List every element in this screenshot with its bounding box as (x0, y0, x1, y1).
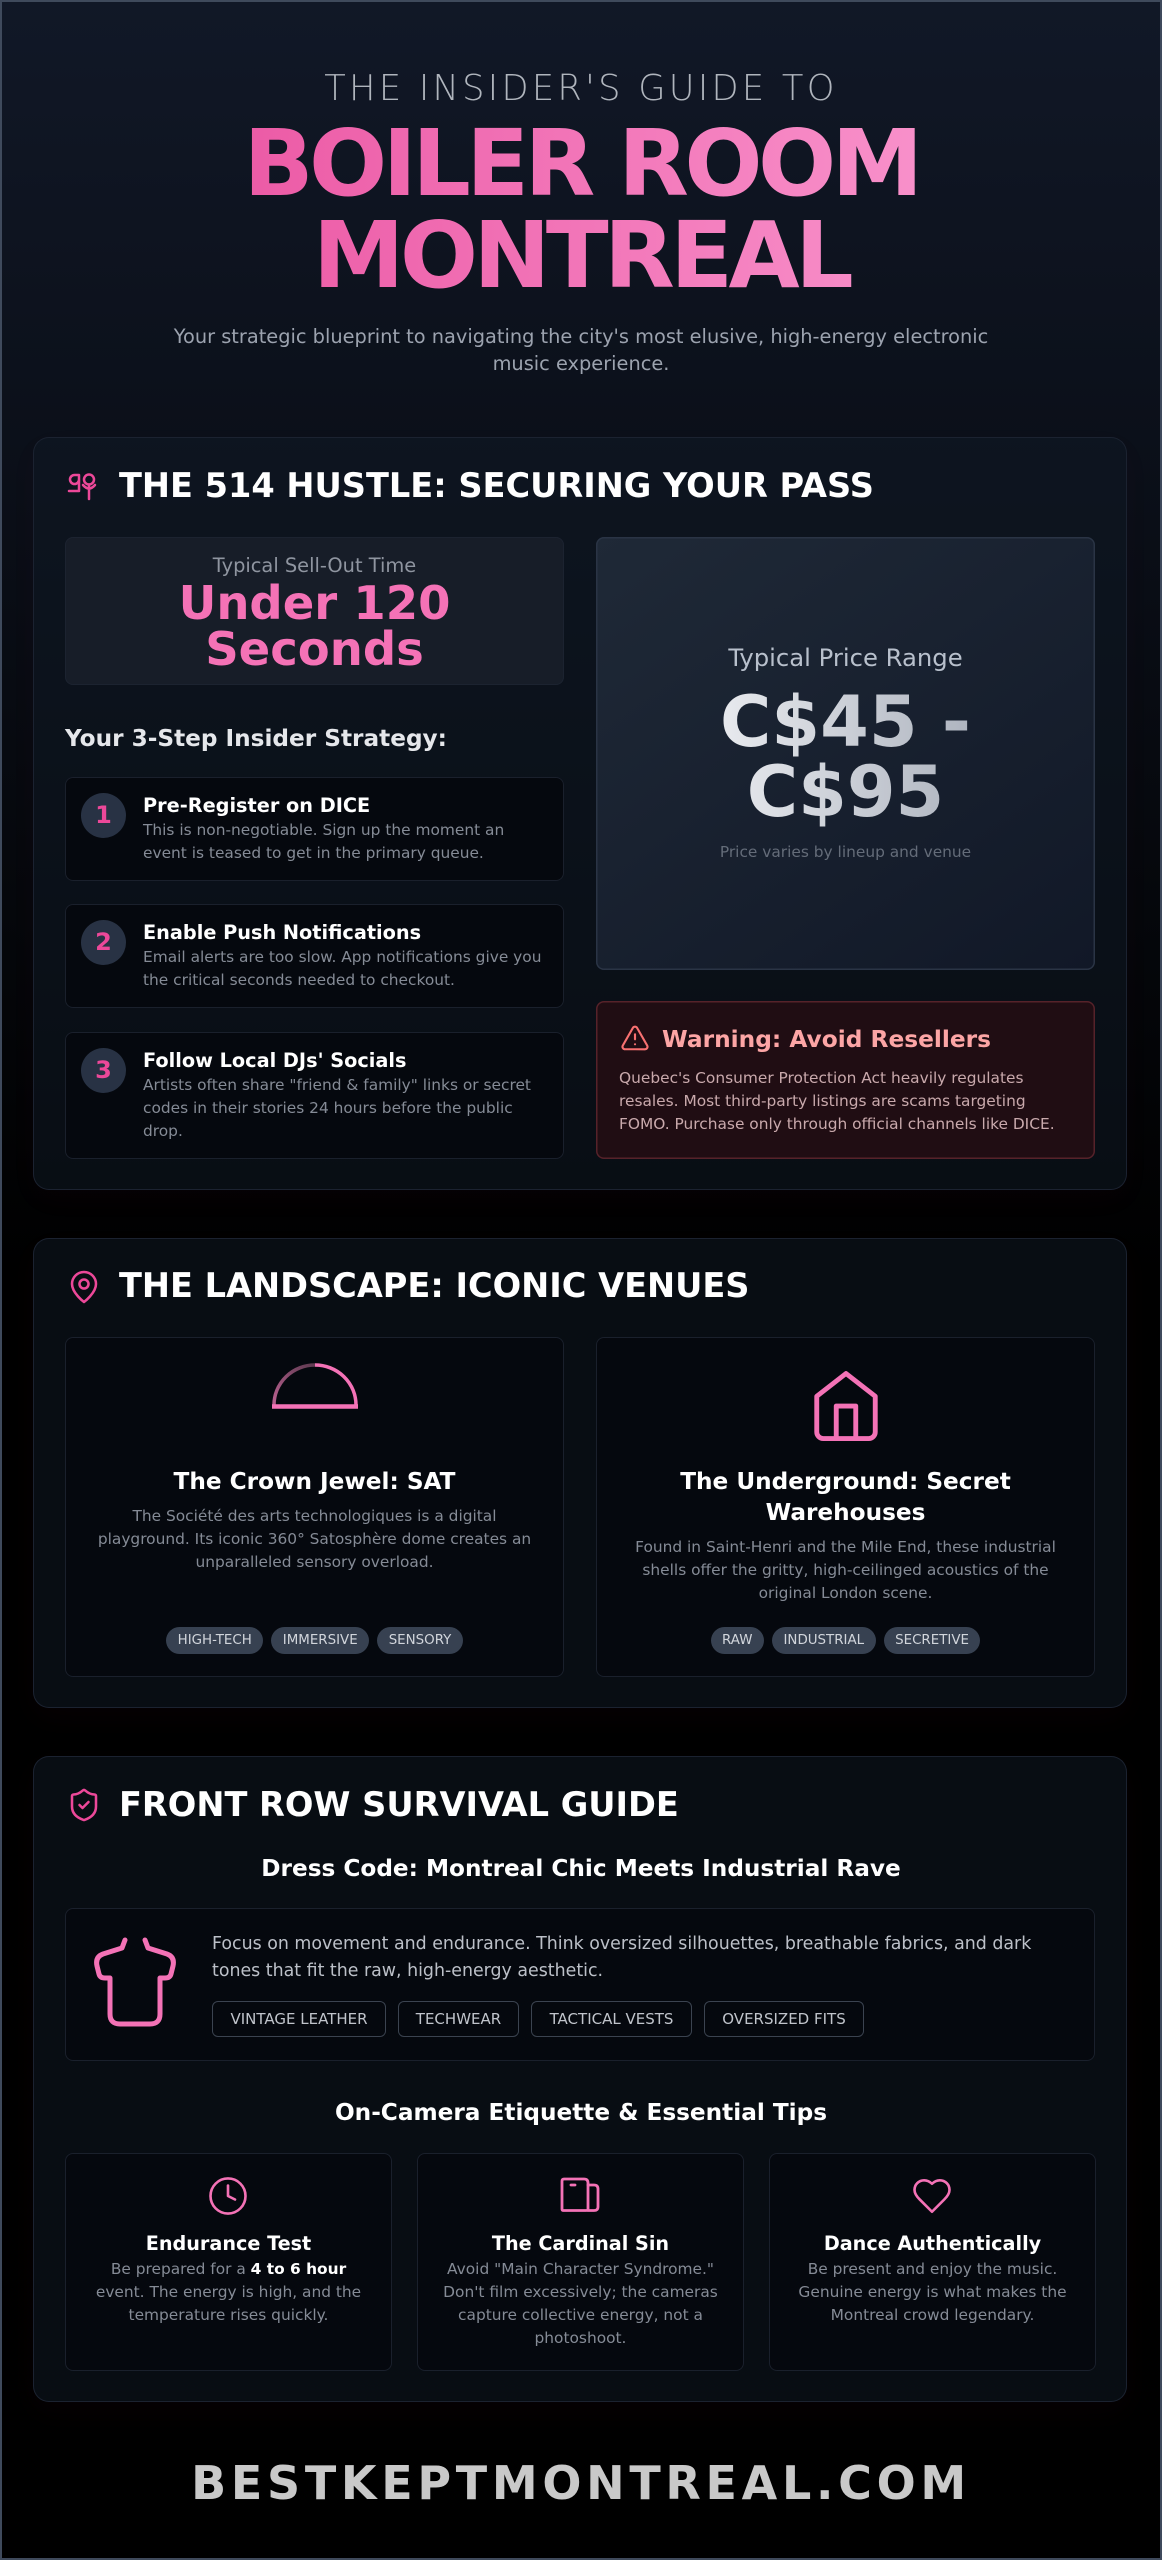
venue text (635, 1538, 1056, 1602)
step number (81, 1048, 126, 1093)
warning text: Quebec's Consumer Protection Act heavily regulates (619, 1069, 1023, 1087)
tip text: Be present and enjoy the music. (808, 2260, 1057, 2278)
tip text: Montreal crowd legendary. (831, 2306, 1034, 2324)
dress code text: tones that fit the raw, high-energy aesthetic. (212, 1961, 603, 1981)
venue card: SAT (65, 1337, 564, 1677)
tip text: event. The energy is high, and the (96, 2283, 361, 2301)
stat value: Under 120 (179, 576, 450, 630)
step number: 3 (95, 1056, 112, 1084)
icon: house (814, 1371, 878, 1441)
venue card: warehouses (596, 1337, 1095, 1677)
tip text: capture collective energy, not a (458, 2306, 703, 2324)
venue text: shells offer the gritty, high-ceilinged acoustics of the (642, 1561, 1049, 1579)
panel: the 514 hustle (33, 437, 1127, 1190)
tip card: cardinal sin (417, 2153, 744, 2371)
venue text: The Société des arts technologiques is a digital (132, 1507, 497, 1525)
section heading: THE LANDSCAPE: ICONIC VENUES (119, 1266, 750, 1305)
tip text: photoshoot. (535, 2329, 626, 2347)
venue title (680, 1468, 1011, 1526)
dress code text (212, 1934, 1032, 1981)
stat: price range (596, 537, 1095, 970)
stat value: Seconds (205, 622, 424, 676)
venue tags: IMMERSIVE (283, 1633, 358, 1648)
step number (81, 793, 126, 838)
price value: C$45 - (720, 681, 971, 763)
tip title: Dance Authentically (824, 2232, 1041, 2255)
price label: Typical Price Range (728, 643, 963, 672)
step text (142, 821, 504, 862)
venue tags: HIGH-TECH (178, 1633, 252, 1648)
subtitle: Your strategic blueprint to navigating the city's most elusive, high-energy electronic (174, 325, 988, 348)
step text: This is non-negotiable. Sign up the moment an (143, 821, 504, 839)
panel: iconic venues (33, 1238, 1127, 1708)
venue tags: RAW (722, 1633, 752, 1648)
icon: map pin (70, 1270, 98, 1304)
step 1 (65, 777, 564, 881)
dress code tags (212, 2001, 864, 2037)
stat: sell-out time (65, 537, 564, 685)
icon: shield check (70, 1788, 98, 1822)
footer brand: BESTKEPTMONTREAL.COM (191, 2456, 971, 2510)
strategy heading: Your 3-Step Insider Strategy: (65, 725, 447, 752)
subtitle: music experience. (493, 352, 669, 375)
step number: 1 (95, 801, 112, 829)
step text: codes in their stories 24 hours before the public (143, 1099, 513, 1117)
icon: dome (272, 1363, 358, 1409)
price value: C$95 (747, 750, 944, 832)
tip text (96, 2260, 361, 2324)
dress code tags: TECHWEAR (416, 2010, 501, 2028)
etiquette heading: On-Camera Etiquette & Essential Tips (335, 2099, 827, 2126)
tip text (443, 2260, 718, 2347)
dress code tags: TACTICAL VESTS (550, 2010, 673, 2028)
warning text: resales. Most third-party listings are scams targeting (619, 1092, 1026, 1110)
step title: Follow Local DJs' Socials (143, 1049, 406, 1072)
venue tags (711, 1627, 980, 1654)
step text: event is teased to get in the primary queue. (143, 844, 484, 862)
step 2 (65, 904, 564, 1008)
step number (81, 920, 126, 965)
venue text (98, 1507, 531, 1571)
warning callout (596, 1001, 1095, 1159)
icon: heart (913, 2179, 951, 2214)
main title: MONTREAL (313, 202, 849, 309)
section heading: FRONT ROW SURVIVAL GUIDE (119, 1785, 679, 1824)
tip text: Don't film excessively; the cameras (443, 2283, 718, 2301)
price note: Price varies by lineup and venue (720, 843, 971, 861)
tip title: Endurance Test (146, 2232, 311, 2255)
step number: 2 (95, 928, 112, 956)
tip text: Avoid "Main Character Syndrome." (447, 2260, 714, 2278)
step text: Email alerts are too slow. App notifications give you (143, 948, 541, 966)
stat value (179, 576, 450, 676)
dress code tags: OVERSIZED FITS (722, 2010, 846, 2028)
venue text: playground. Its iconic 360° Satosphère dome creates an (98, 1530, 531, 1548)
tip text: Be prepared for a 4 to 6 hour (111, 2260, 346, 2278)
venue text: unparalleled sensory overload. (195, 1553, 434, 1571)
dress code heading: Dress Code: Montreal Chic Meets Industrial Rave (261, 1855, 901, 1882)
venue tags: SENSORY (389, 1633, 451, 1648)
step 3 (65, 1032, 564, 1159)
venue title: The Crown Jewel: SAT (174, 1468, 455, 1495)
venue tags: INDUSTRIAL (783, 1633, 864, 1648)
venue tags (166, 1627, 463, 1654)
step text (143, 1076, 531, 1140)
tip text: temperature rises quickly. (129, 2306, 328, 2324)
warning text (619, 1069, 1055, 1133)
step text (143, 948, 541, 989)
warning title: Warning: Avoid Resellers (662, 1026, 991, 1053)
icon: phone (560, 2178, 600, 2212)
icon: shirt (94, 1938, 176, 2026)
tip title: The Cardinal Sin (492, 2232, 669, 2255)
main title (243, 110, 919, 309)
subtitle (174, 325, 988, 375)
dress code tags: VINTAGE LEATHER (230, 2010, 368, 2028)
venue text: original London scene. (759, 1584, 932, 1602)
header kicker: THE INSIDER'S GUIDE TO (324, 68, 838, 109)
main title: BOILER ROOM (243, 110, 919, 217)
step title: Pre-Register on DICE (143, 794, 370, 817)
step text: drop. (143, 1122, 183, 1140)
step title: Enable Push Notifications (143, 921, 421, 944)
venue tags: SECRETIVE (895, 1633, 969, 1648)
tip card: dance (769, 2153, 1096, 2371)
step text: the critical seconds needed to checkout. (143, 971, 455, 989)
icon: clock (209, 2177, 247, 2215)
price value (720, 681, 971, 832)
icon: warning triangle (621, 1026, 649, 1050)
tip text: Genuine energy is what makes the (798, 2283, 1067, 2301)
warning text: FOMO. Purchase only through official channels like DICE. (619, 1115, 1055, 1133)
step text: Artists often share "friend & family" links or secret (143, 1076, 531, 1094)
panel: front row survival guide (33, 1756, 1127, 2402)
venue text: Found in Saint-Henri and the Mile End, these industrial (635, 1538, 1056, 1556)
icon: ticket (68, 473, 96, 500)
tip card: endurance (65, 2153, 392, 2371)
section heading: THE 514 HUSTLE: SECURING YOUR PASS (119, 466, 874, 505)
tip text (798, 2260, 1067, 2324)
dress code text: Focus on movement and endurance. Think oversized silhouettes, breathable fabrics, and dark (212, 1934, 1031, 1954)
venue title: The Underground: Secret (680, 1468, 1011, 1495)
stat label: Typical Sell-Out Time (213, 554, 416, 577)
dress code card (65, 1908, 1095, 2061)
venue title: Warehouses (766, 1499, 925, 1526)
